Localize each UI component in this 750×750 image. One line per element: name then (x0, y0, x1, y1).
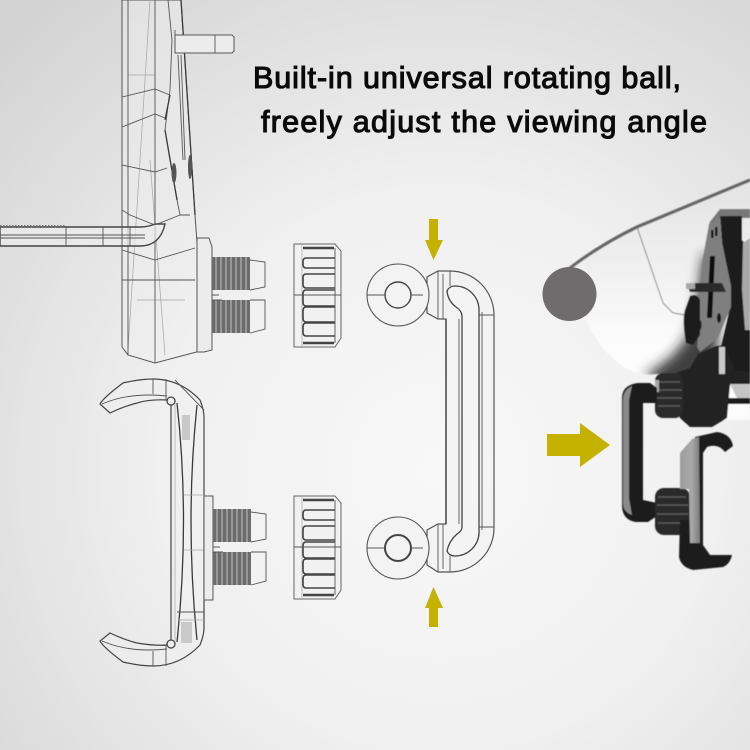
wireframe: upper clamp side view (0, 0, 265, 363)
grey pads (181, 415, 192, 643)
swing arm highlight (623, 386, 632, 515)
title (253, 61, 707, 139)
rear round boss (684, 295, 700, 345)
title line 1: Built-in universal rotating ball, (253, 61, 681, 95)
lower knurled knob (655, 488, 690, 535)
mount plate (204, 496, 213, 600)
bracket right panel (742, 238, 750, 330)
thread post (212, 257, 265, 333)
lower right light stripe (730, 384, 750, 398)
grey ball marker (542, 267, 596, 321)
bracket pin (686, 283, 726, 292)
lock nut: upper (294, 244, 341, 347)
small light rectangle (719, 347, 725, 374)
clamp ovals (172, 155, 192, 183)
wireframe: lower phone clamp (100, 379, 266, 666)
product photo: assembled mount (570, 180, 750, 570)
horizontal rod (0, 224, 165, 246)
bracket front face (693, 216, 731, 352)
suction bowl (570, 180, 750, 420)
arrow: press down (425, 219, 443, 260)
clamp grey face (680, 437, 700, 543)
upper knurled knob (655, 373, 683, 418)
clamp joints (167, 397, 175, 648)
clamp body (122, 0, 204, 363)
mount plate (197, 238, 212, 352)
lock nut: lower (294, 496, 341, 599)
windshield edge (570, 180, 750, 268)
lower black mass (670, 345, 750, 427)
arrow: press up (425, 587, 443, 627)
top tab (175, 35, 234, 53)
clamp dark hooks (679, 432, 733, 570)
bracket top strip (709, 209, 750, 224)
arm inner slot (447, 286, 479, 556)
upper ball ring (367, 264, 429, 326)
bracket dark band (712, 216, 750, 385)
thread post (213, 509, 266, 585)
bracket slot (707, 256, 715, 318)
arrow: result (547, 423, 610, 467)
clamp outline (100, 379, 204, 666)
wireframe: swing arm handle (367, 264, 494, 579)
black swing arm (622, 383, 657, 522)
lower ball ring (367, 517, 429, 579)
arm outline (427, 271, 494, 572)
title line 2: freely adjust the viewing angle (261, 105, 707, 139)
bowl shadow (645, 255, 718, 385)
bracket holes (698, 227, 721, 330)
lower phone clamp (679, 432, 733, 570)
